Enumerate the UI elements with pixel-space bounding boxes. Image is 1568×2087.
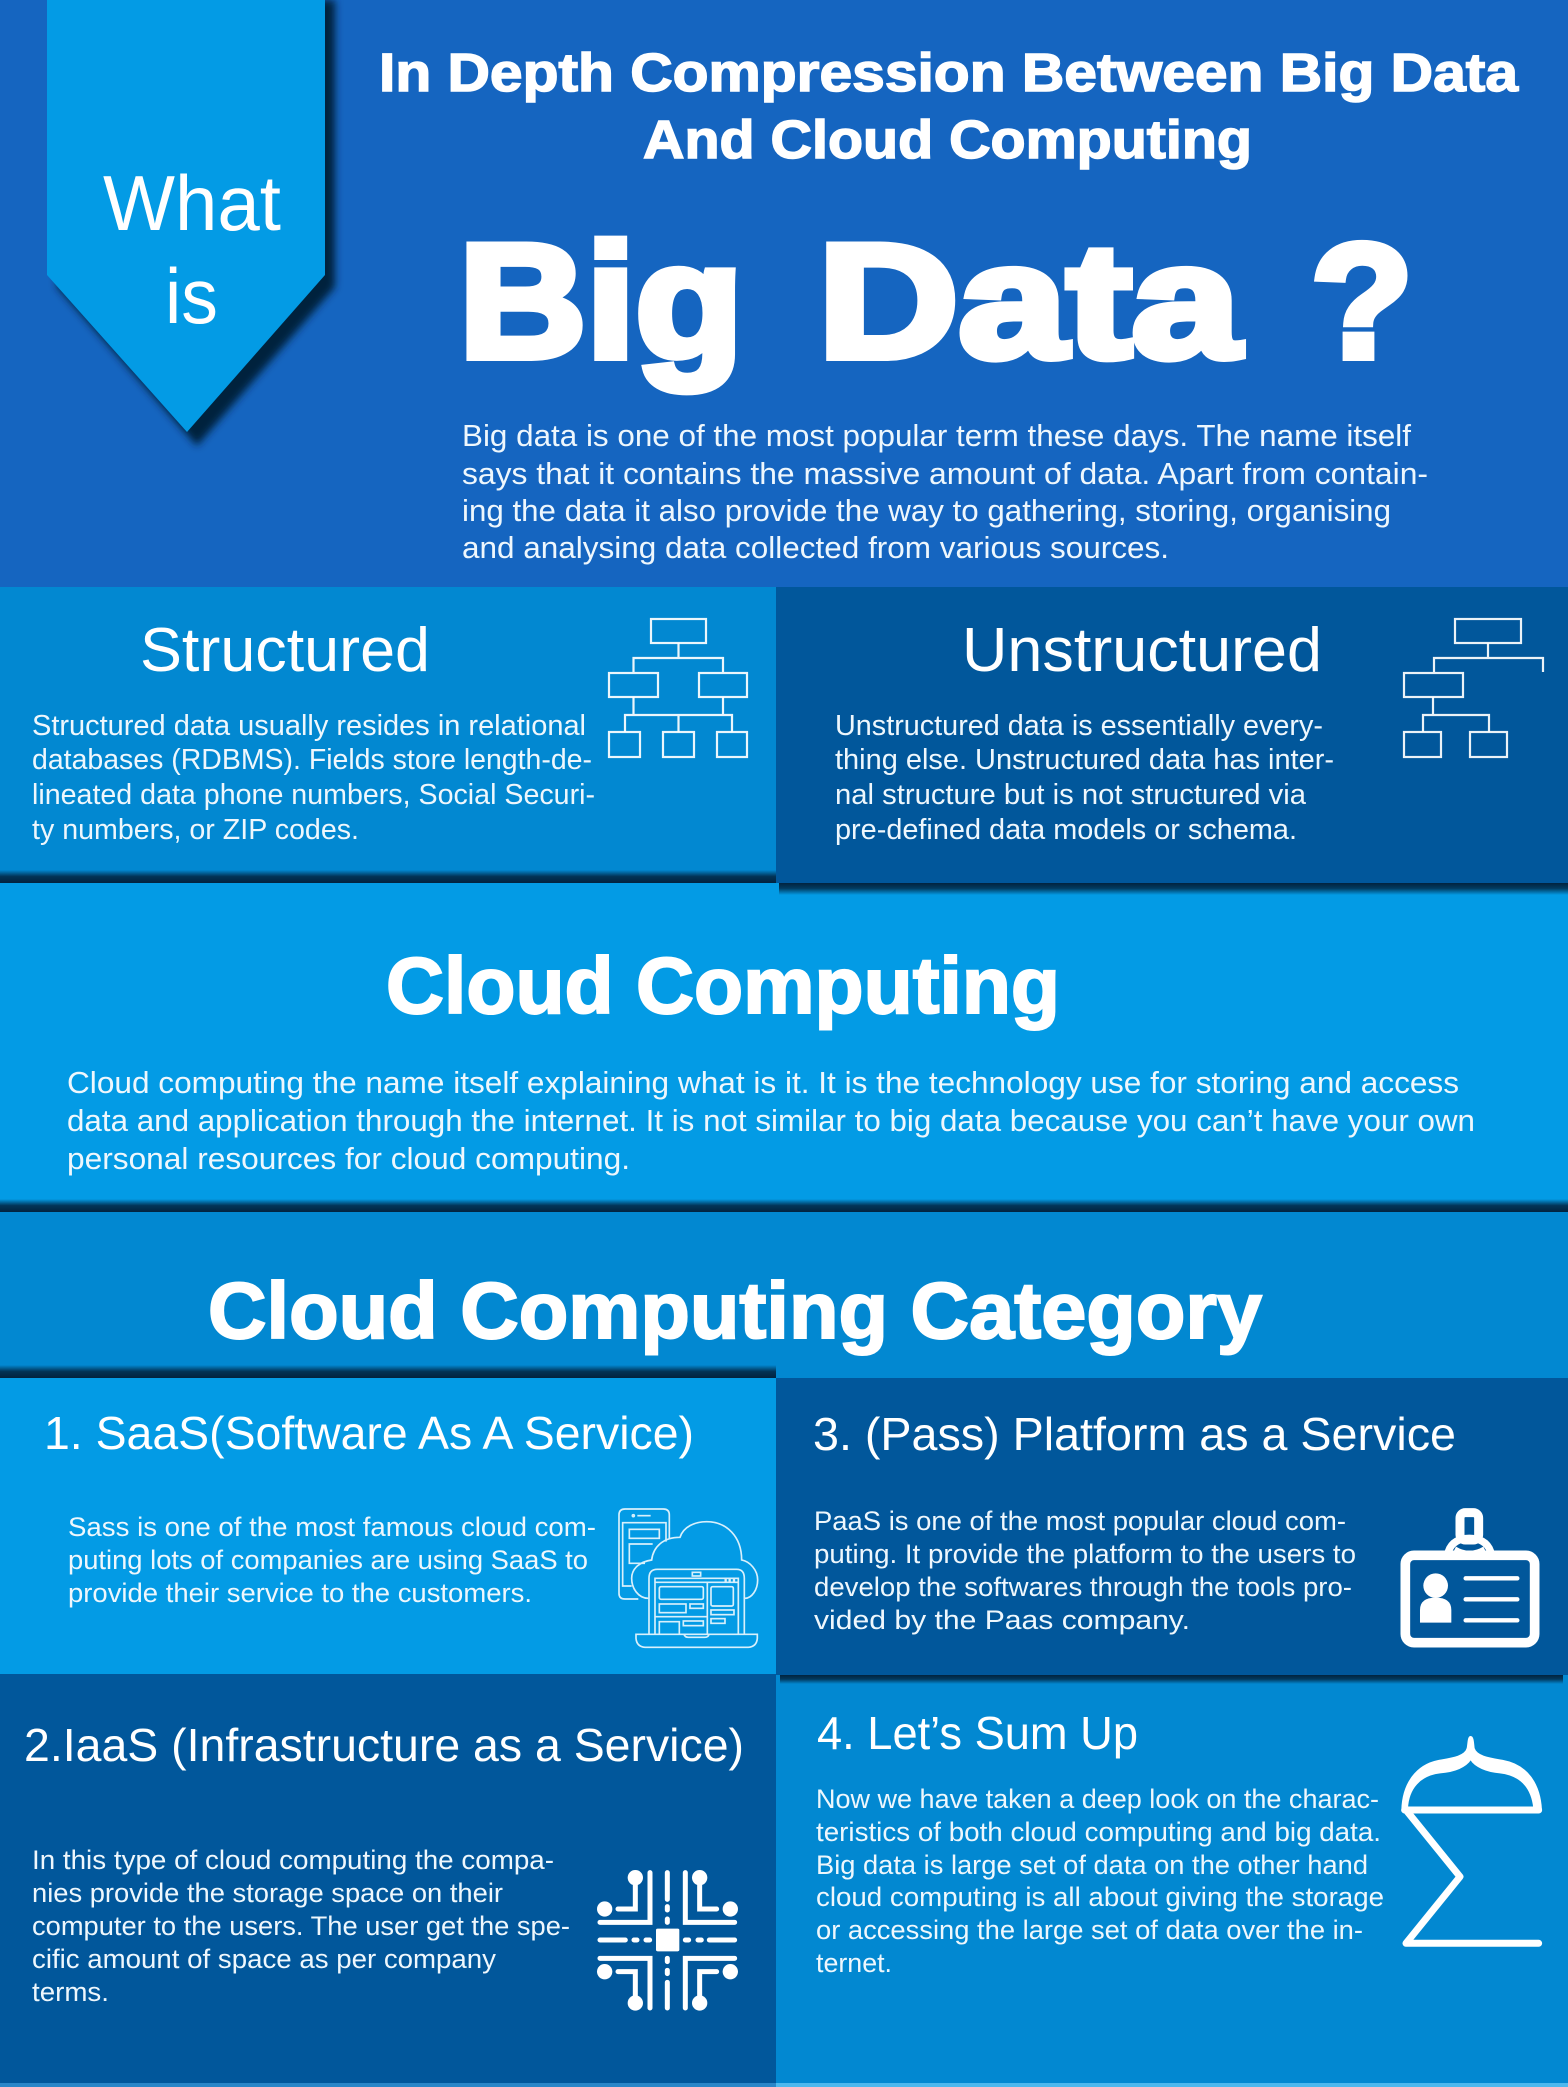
text: big data intro: and analysing data collected from various sources. bbox=[462, 530, 1169, 565]
icon: sigma with dome bbox=[1402, 1737, 1541, 1943]
heading: 4. Let's Sum Up: 4. Let’s Sum Up bbox=[817, 1707, 1138, 1759]
ribbon: What is: What bbox=[103, 159, 281, 247]
panel: sum up bbox=[776, 1675, 1568, 2083]
heading: PaaS: 3. (Pass) Platform as a Service bbox=[813, 1408, 1456, 1460]
text: PaaS description: vided by the Paas company. bbox=[814, 1605, 1190, 1635]
text: big data intro bbox=[462, 418, 1428, 565]
text: sum up description bbox=[816, 1784, 1384, 1978]
icon: circuit chip bbox=[597, 1870, 738, 2011]
title: In Depth Compression Between Big Data bbox=[379, 43, 1519, 103]
icon: ID badge bbox=[1405, 1513, 1535, 1643]
title bbox=[379, 43, 1519, 170]
heading: Unstructured: Unstructured bbox=[962, 616, 1322, 685]
text: cloud computing description: data and application through the internet. It is not similar to big data because you can’t have your own bbox=[67, 1103, 1475, 1138]
text: PaaS description: puting. It provide the platform to the users to bbox=[814, 1539, 1356, 1569]
panel: header bbox=[0, 0, 1568, 588]
text: unstructured description: nal structure but is not structured via bbox=[835, 779, 1307, 811]
text: big data intro: ing the data it also provide the way to gathering, storing, organising bbox=[462, 493, 1391, 528]
heading: Cloud Computing: Cloud Computing bbox=[386, 941, 1060, 1030]
text: SaaS description: puting lots of companies are using SaaS to bbox=[68, 1545, 588, 1575]
text: big data intro: says that it contains the massive amount of data. Apart from contain- bbox=[462, 456, 1428, 491]
panel: cloud computing bbox=[0, 880, 1568, 1212]
icon: partial org chart bbox=[1404, 619, 1543, 757]
heading: SaaS: 1. SaaS(Software As A Service) bbox=[44, 1407, 694, 1459]
text: structured description: ty numbers, or ZIP codes. bbox=[32, 814, 359, 846]
title: And Cloud Computing bbox=[643, 110, 1252, 170]
text: structured description bbox=[32, 710, 595, 846]
text: SaaS description: Sass is one of the most famous cloud com- bbox=[68, 1512, 596, 1542]
panel: unstructured bbox=[776, 587, 1568, 895]
heading: Structured: Structured bbox=[140, 616, 430, 685]
heading: Big Data ? bbox=[459, 211, 1413, 392]
panel: structured bbox=[0, 587, 776, 883]
icon: org chart bbox=[609, 619, 747, 757]
ribbon: What is bbox=[47, 0, 335, 446]
text: sum up description: or accessing the large set of data over the in- bbox=[816, 1915, 1363, 1945]
text: SaaS description: provide their service to the customers. bbox=[68, 1578, 532, 1608]
text: unstructured description bbox=[835, 710, 1334, 846]
heading: IaaS: 2.IaaS (Infrastructure as a Service) bbox=[24, 1719, 744, 1771]
text: IaaS description: cific amount of space as per company bbox=[32, 1944, 497, 1974]
heading: Big Data ?: Data bbox=[818, 211, 1242, 392]
icon: cloud devices bbox=[619, 1509, 758, 1647]
text: sum up description: Big data is large set of data on the other hand bbox=[816, 1850, 1368, 1880]
text: PaaS description: PaaS is one of the most popular cloud com- bbox=[814, 1506, 1346, 1536]
text: PaaS description: develop the softwares through the tools pro- bbox=[814, 1572, 1352, 1602]
panel: cloud computing category bbox=[0, 1212, 1568, 1378]
panel: IaaS bbox=[0, 1674, 776, 2083]
text: IaaS description: In this type of cloud computing the compa- bbox=[32, 1845, 554, 1875]
text: cloud computing description: personal resources for cloud computing. bbox=[67, 1141, 630, 1176]
text: cloud computing description: Cloud computing the name itself explaining what is it. It is the technology use for storing and access bbox=[67, 1065, 1459, 1100]
text: structured description: lineated data phone numbers, Social Securi- bbox=[32, 779, 595, 811]
heading: Big Data ?: ? bbox=[1311, 211, 1413, 392]
ribbon: What is: is bbox=[165, 252, 218, 340]
text: sum up description: cloud computing is all about giving the storage bbox=[816, 1882, 1384, 1912]
text: IaaS description: computer to the users. The user get the spe- bbox=[32, 1911, 570, 1941]
text: sum up description: teristics of both cloud computing and big data. bbox=[816, 1817, 1381, 1847]
text: structured description: databases (RDBMS). Fields store length-de- bbox=[32, 744, 592, 776]
text: sum up description: Now we have taken a deep look on the charac- bbox=[816, 1784, 1379, 1814]
text: PaaS description bbox=[814, 1506, 1356, 1635]
text: IaaS description: nies provide the storage space on their bbox=[32, 1878, 503, 1908]
text: unstructured description: pre-defined data models or schema. bbox=[835, 814, 1297, 846]
heading: Big Data ?: Big bbox=[459, 211, 743, 392]
text: big data intro: Big data is one of the most popular term these days. The name itself bbox=[462, 418, 1411, 453]
text: SaaS description bbox=[68, 1512, 596, 1608]
text: cloud computing description bbox=[67, 1065, 1475, 1176]
text: structured description: Structured data usually resides in relational bbox=[32, 710, 586, 742]
text: unstructured description: Unstructured data is essentially every- bbox=[835, 710, 1323, 742]
text: IaaS description bbox=[32, 1845, 570, 2007]
panel: SaaS bbox=[0, 1378, 776, 1674]
text: unstructured description: thing else. Unstructured data has inter- bbox=[835, 744, 1334, 776]
text: IaaS description: terms. bbox=[32, 1977, 109, 2007]
heading: Cloud Computing Category: Cloud Computing Category bbox=[208, 1266, 1263, 1355]
panel: PaaS bbox=[776, 1378, 1568, 1684]
text: sum up description: ternet. bbox=[816, 1948, 892, 1978]
